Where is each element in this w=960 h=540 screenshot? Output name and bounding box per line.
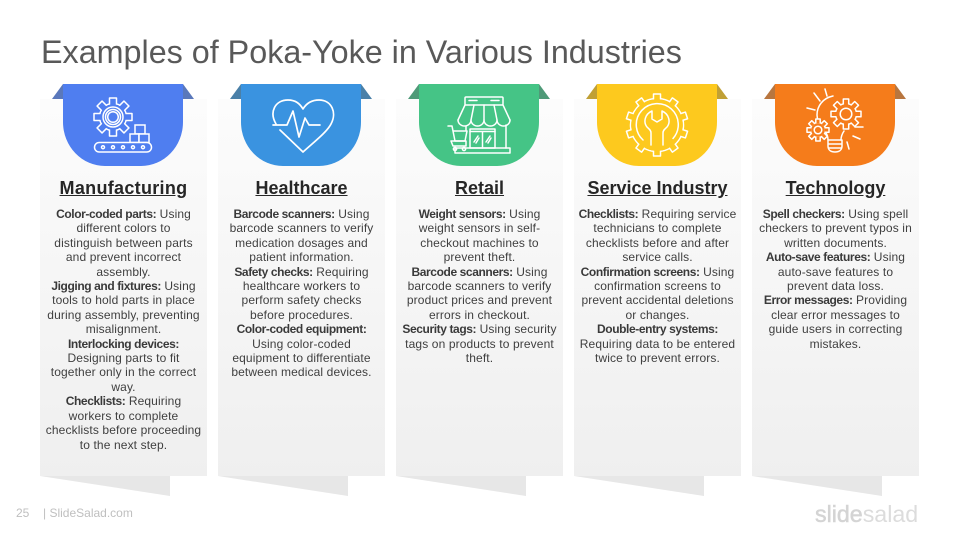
body text: Color-coded parts: Using <box>56 207 191 221</box>
heading: Retail <box>455 178 504 198</box>
title: Examples of Poka-Yoke in Various Industries <box>41 34 682 70</box>
body text: Requiring data to be entered <box>580 337 735 351</box>
body text: Checklists: Requiring <box>66 394 181 408</box>
body text: assembly. <box>96 265 151 279</box>
ribbon ears <box>408 84 550 99</box>
body text: during assembly, preventing <box>47 308 200 322</box>
body text: Color-coded equipment: <box>237 322 366 336</box>
body text: tools to hold parts in place <box>52 293 195 307</box>
body text: mistakes. <box>810 337 861 351</box>
body text: Jigging and fixtures: Using <box>51 279 196 293</box>
icon: gear on conveyor <box>93 97 152 153</box>
icon: storefront and cart <box>447 96 511 154</box>
body text: misalignment. <box>86 322 161 336</box>
body text: Auto-save features: Using <box>766 250 905 264</box>
panel: technology <box>752 84 919 496</box>
body text: checkers to prevent typos in <box>759 221 912 235</box>
body text: equipment to differentiate <box>232 351 371 365</box>
body text: to the next step. <box>80 438 167 452</box>
panel background <box>752 99 919 476</box>
paper fold <box>397 476 526 496</box>
body text: patient information. <box>249 250 354 264</box>
body text: and prevent incorrect <box>66 250 181 264</box>
body text: prevent data loss. <box>787 279 884 293</box>
body text: tags on products to prevent <box>405 337 554 351</box>
body text: service calls. <box>622 250 693 264</box>
body text: Using color-coded <box>252 337 351 351</box>
body text <box>46 207 201 452</box>
body text: together only in the correct <box>51 365 196 379</box>
body text: errors in checkout. <box>429 308 530 322</box>
panel background <box>218 99 385 476</box>
paper fold <box>753 476 882 496</box>
panel background <box>40 99 207 476</box>
body text <box>402 207 557 365</box>
footer site name: | SlideSalad.com <box>43 506 133 520</box>
body text: barcode scanners to verify <box>408 279 551 293</box>
yellow badge with icon <box>597 84 717 166</box>
ribbon ears <box>586 84 728 99</box>
body text: prevent accidental deletions <box>581 293 734 307</box>
panel: retail <box>396 84 563 496</box>
body text: twice to prevent errors. <box>595 351 720 365</box>
body text: between medical devices. <box>231 365 372 379</box>
body text: Barcode scanners: Using <box>412 265 547 279</box>
body text: confirmation screens to <box>594 279 721 293</box>
body text: checklists before proceeding <box>46 423 201 437</box>
body text: medication dosages and <box>235 236 368 250</box>
body text: guide users in correcting <box>769 322 902 336</box>
body text: Interlocking devices: <box>68 337 179 351</box>
body text: distinguish between parts <box>54 236 193 250</box>
body text: way. <box>111 380 136 394</box>
body text: auto-save features to <box>778 265 893 279</box>
green badge with icon <box>419 84 539 166</box>
body text: written documents. <box>784 236 887 250</box>
body text: Weight sensors: Using <box>419 207 540 221</box>
heading: Technology <box>786 178 885 198</box>
panel: healthcare <box>218 84 385 496</box>
blue badge with icon <box>241 84 361 166</box>
panel: service industry <box>574 84 741 496</box>
body text <box>759 207 912 351</box>
heading: Manufacturing <box>60 178 187 198</box>
body text: workers to complete <box>69 409 178 423</box>
body text: clear error messages to <box>771 308 900 322</box>
body text: weight sensors in self- <box>419 221 540 235</box>
body text: before procedures. <box>250 308 353 322</box>
paper fold <box>575 476 704 496</box>
paper fold <box>41 476 170 496</box>
body text: Double-entry systems: <box>597 322 718 336</box>
body text: perform safety checks <box>242 293 361 307</box>
body text: theft. <box>466 351 493 365</box>
panel: manufacturing <box>40 84 207 496</box>
panel background <box>396 99 563 476</box>
body text <box>230 207 374 379</box>
body text: prevent theft. <box>444 250 515 264</box>
body text: Security tags: Using security <box>402 322 557 336</box>
ribbon ears <box>230 84 372 99</box>
logo wordmark: slidesalad <box>815 501 918 527</box>
paper fold <box>219 476 348 496</box>
body text: Error messages: Providing <box>764 293 907 307</box>
body text: Barcode scanners: Using <box>234 207 369 221</box>
body text: barcode scanners to verify <box>230 221 373 235</box>
body text: Spell checkers: Using spell <box>763 207 908 221</box>
panel background <box>574 99 741 476</box>
ribbon ears <box>52 84 194 99</box>
body text <box>579 207 736 365</box>
orange badge with icon <box>775 84 895 166</box>
body text: product prices and prevent <box>407 293 552 307</box>
body text: technicians to complete <box>593 221 722 235</box>
body text: checklists before and after <box>586 236 729 250</box>
body text: Confirmation screens: Using <box>581 265 734 279</box>
page number: 25 <box>16 506 29 520</box>
body text: Checklists: Requiring service <box>579 207 736 221</box>
body text: healthcare workers to <box>243 279 360 293</box>
blue badge with icon <box>63 84 183 166</box>
ribbon ears <box>764 84 906 99</box>
heading: Healthcare <box>255 178 348 198</box>
body text: or changes. <box>625 308 690 322</box>
body text: Safety checks: Requiring <box>234 265 369 279</box>
body text: checkout machines to <box>420 236 539 250</box>
icon: heart with pulse <box>272 99 334 153</box>
body text: different colors to <box>76 221 171 235</box>
icon: gear with wrench <box>626 93 688 157</box>
heading: Service Industry <box>587 178 728 198</box>
icon: lightbulb with gears <box>806 88 864 153</box>
body text: Designing parts to fit <box>67 351 180 365</box>
